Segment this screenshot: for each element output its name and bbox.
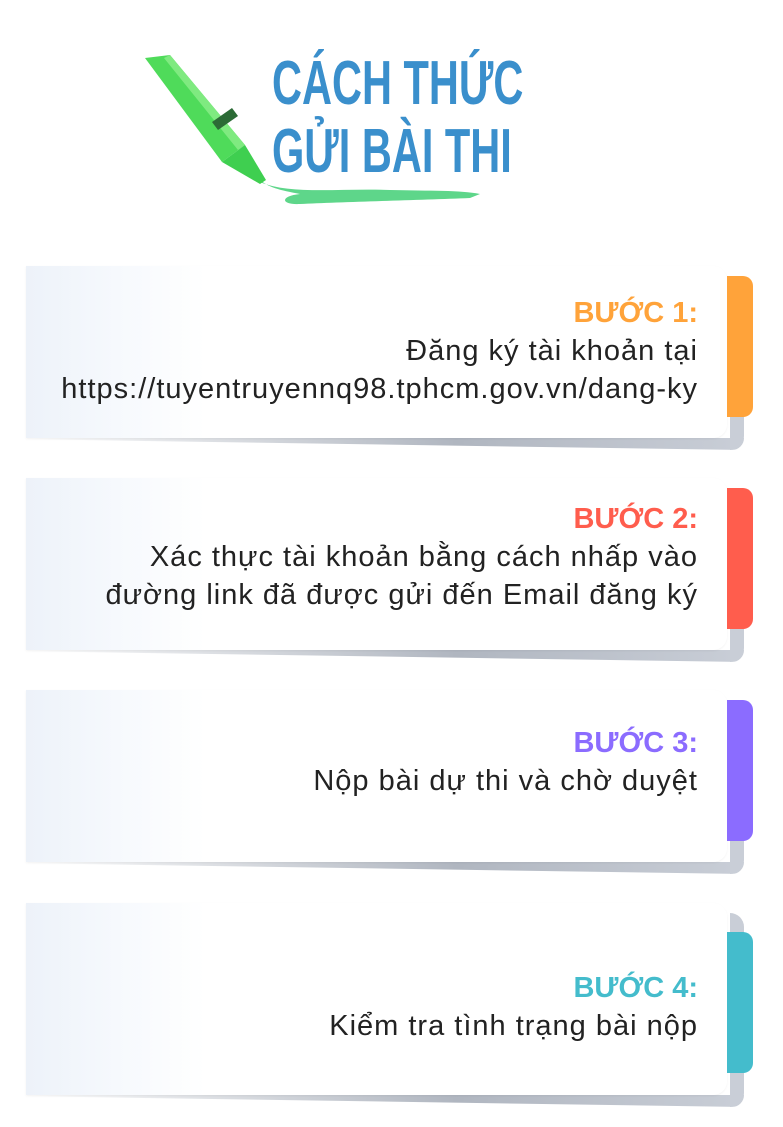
icon: crayon — [145, 55, 480, 204]
text: step 2: BƯỚC 2: — [573, 503, 698, 535]
tab: teal — [727, 932, 753, 1073]
text: step 1 — [61, 296, 698, 405]
text: step 1: BƯỚC 1: — [573, 297, 698, 329]
tab: red — [727, 488, 753, 629]
text: step 4 — [329, 972, 698, 1042]
tab: orange — [727, 276, 753, 417]
panel: step 4 — [26, 903, 753, 1107]
text: step 4: BƯỚC 4: — [573, 972, 698, 1004]
text: step 3: BƯỚC 3: — [573, 727, 698, 759]
title: GỬI BÀI THI — [272, 117, 512, 186]
text: step 2 — [105, 502, 698, 611]
panel: step 1 — [26, 266, 753, 450]
tab: purple — [727, 700, 753, 841]
text: step 2: đường link đã được gửi đến Email đăng ký — [105, 579, 698, 611]
text: step 3 — [313, 726, 698, 797]
panel: step 3 — [26, 690, 753, 874]
panel: step 2 — [26, 478, 753, 662]
text: step 1: Đăng ký tài khoản tại — [406, 335, 698, 367]
title — [272, 49, 523, 186]
text: step 4: Kiểm tra tình trạng bài nộp — [329, 1010, 698, 1042]
text: step 3: Nộp bài dự thi và chờ duyệt — [313, 765, 698, 797]
text: step 2: Xác thực tài khoản bằng cách nhấp vào — [150, 541, 698, 573]
text: step 1: https://tuyentruyennq98.tphcm.gov.vn/dang-ky — [61, 373, 698, 405]
title: CÁCH THỨC — [272, 49, 523, 118]
